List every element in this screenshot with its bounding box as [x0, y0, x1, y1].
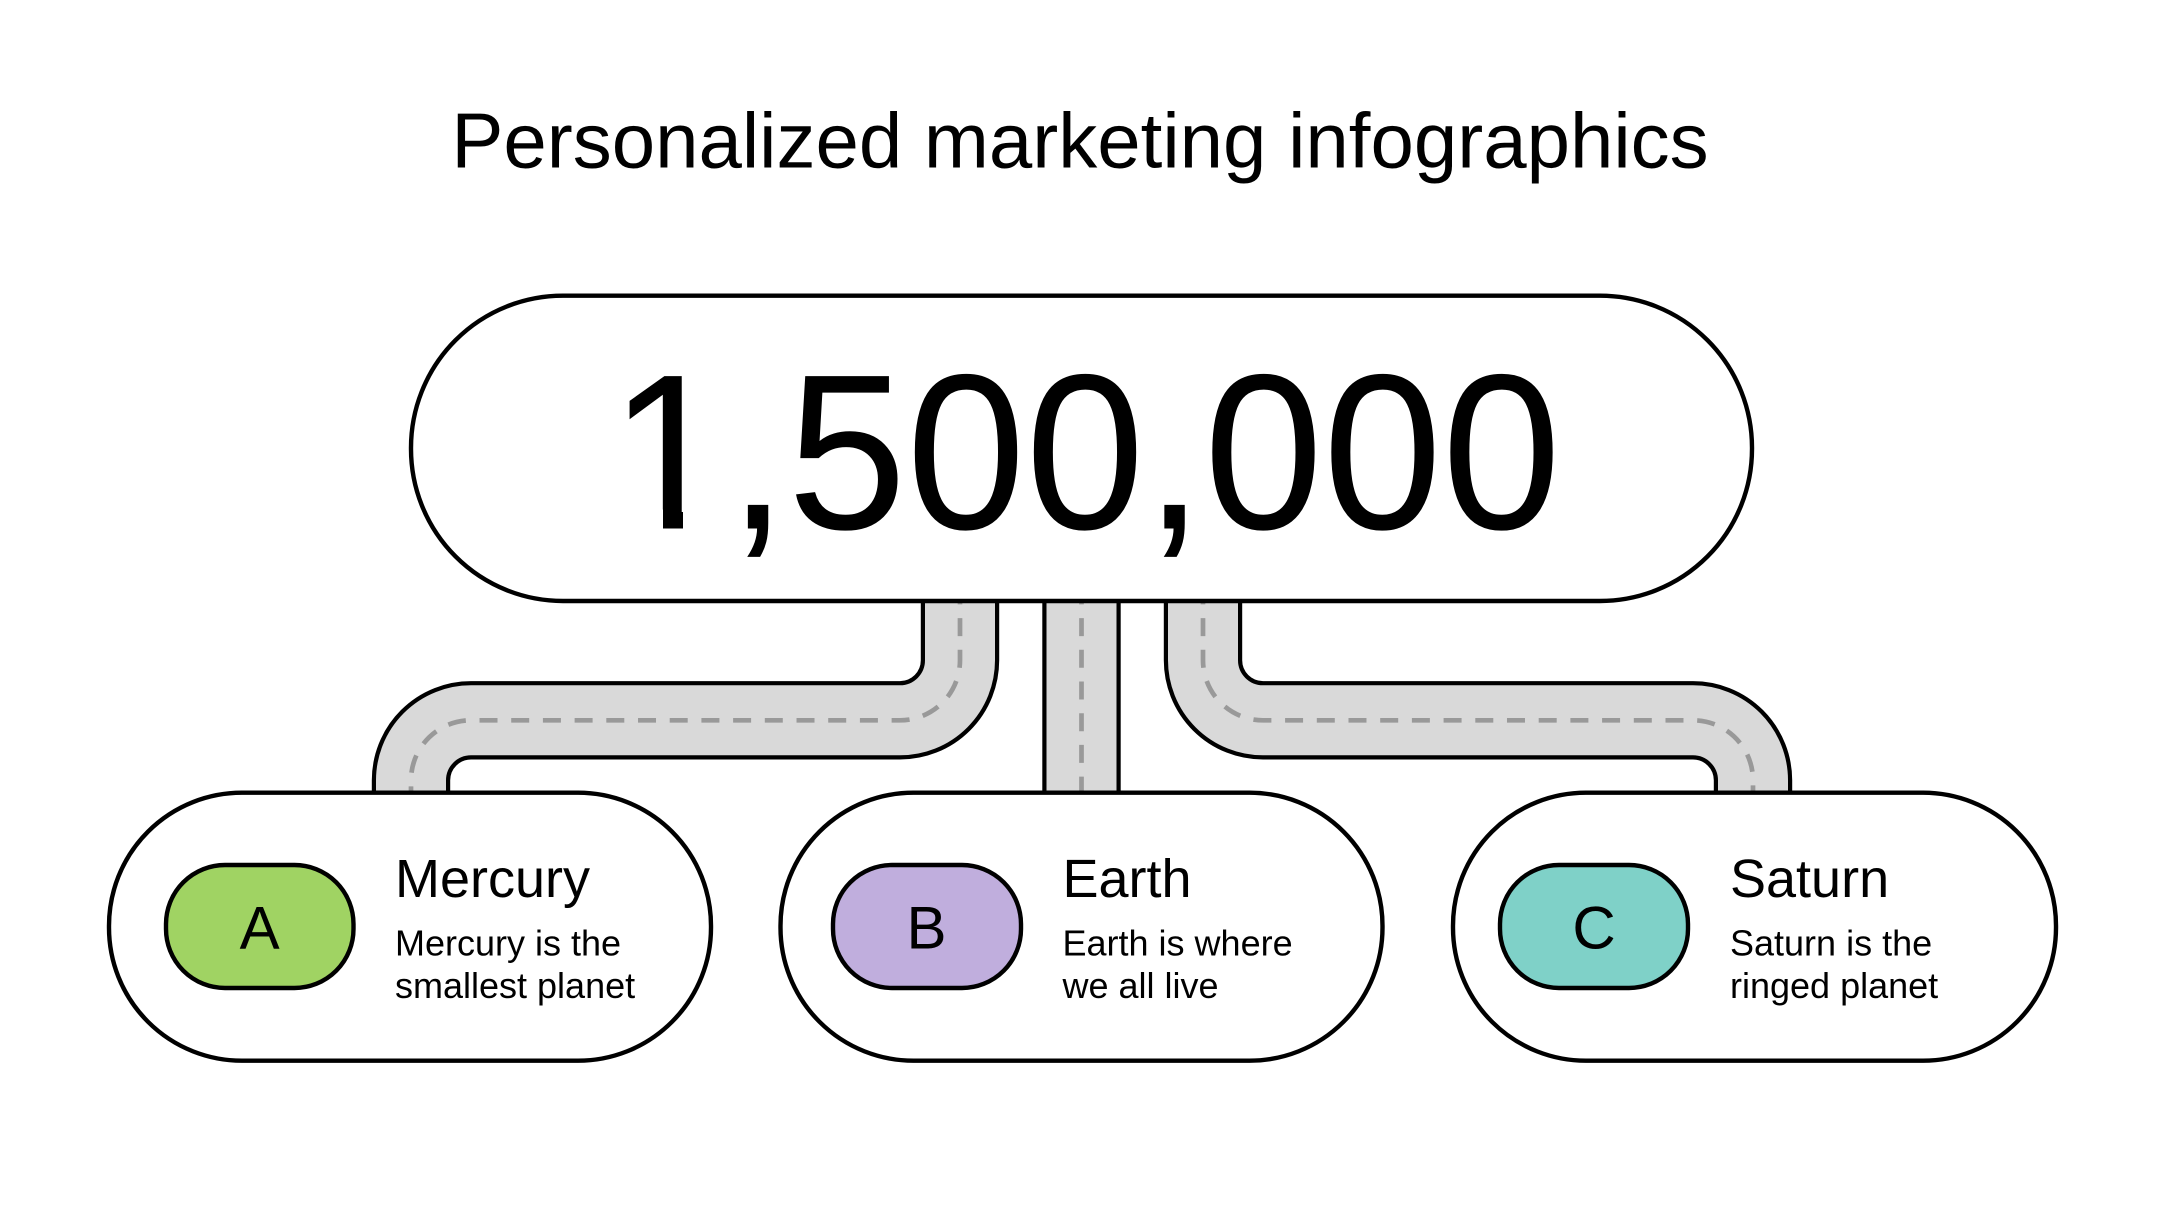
text: Mercury: smallest planet	[395, 965, 635, 1006]
text: Saturn	[1730, 849, 1938, 1006]
text: Mercury: Mercury	[395, 849, 590, 909]
badge C: C	[1572, 894, 1616, 962]
title: Personalized marketing infographics	[451, 96, 1709, 184]
text: Saturn: Saturn is the	[1730, 922, 1932, 964]
badge A: A	[240, 894, 280, 962]
text: Earth: Earth is where	[1062, 922, 1293, 964]
text: Mercury	[395, 849, 635, 1006]
panel: Saturn	[1453, 793, 2056, 1061]
text: Earth: we all live	[1062, 965, 1219, 1006]
panel: Mercury	[109, 793, 711, 1061]
badge B	[833, 865, 1021, 988]
big number: 1,500,000	[609, 329, 1561, 576]
text: Earth: Earth	[1062, 849, 1192, 909]
text: Mercury: Mercury is the	[395, 922, 621, 964]
badge C	[1500, 865, 1688, 988]
badge B: B	[906, 894, 947, 962]
road: connector to Saturn	[1203, 586, 1753, 805]
panel: total number	[411, 296, 1752, 601]
text: Saturn: ringed planet	[1730, 965, 1938, 1006]
road: connector to Earth	[1042, 586, 1121, 805]
road: connector to Mercury	[411, 586, 960, 805]
panel: Earth	[780, 793, 1382, 1061]
text: Earth	[1062, 849, 1293, 1006]
text: Saturn: Saturn	[1730, 849, 1889, 909]
badge A	[166, 865, 354, 988]
